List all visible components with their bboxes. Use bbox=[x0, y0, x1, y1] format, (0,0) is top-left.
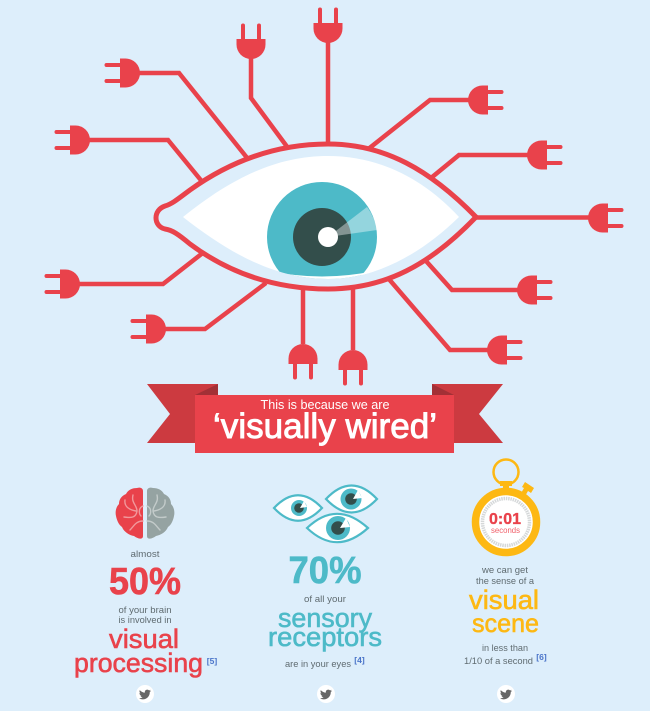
timer reading: 0:01 bbox=[489, 511, 521, 528]
column: eyes bbox=[268, 486, 382, 703]
citation 4: [4] bbox=[354, 655, 365, 665]
almost: almost bbox=[130, 549, 160, 560]
50%: 50% bbox=[109, 561, 181, 603]
plug: upper left bbox=[106, 58, 248, 159]
iris base cut bbox=[288, 272, 368, 279]
are in your eyes: are in your eyes bbox=[285, 659, 351, 670]
icon: twitter bbox=[497, 685, 515, 703]
of your brain: of your brain bbox=[118, 605, 172, 616]
ribbon front bbox=[195, 395, 454, 453]
iris and pupil bbox=[267, 182, 377, 279]
icon: eye bottom bbox=[307, 514, 368, 542]
in less than: in less than bbox=[482, 643, 528, 654]
seconds label: seconds bbox=[491, 526, 520, 535]
1/10 of a second: 1/10 of a second bbox=[464, 656, 533, 667]
citation 5: [5] bbox=[207, 656, 217, 666]
eye outline bbox=[156, 144, 476, 289]
eye white bbox=[183, 156, 459, 279]
plug: top right bbox=[367, 86, 502, 150]
ribbon left tail bbox=[147, 384, 218, 443]
pupil highlight bbox=[318, 227, 338, 247]
plug: middle left bbox=[56, 126, 204, 184]
light reflection bbox=[336, 207, 376, 236]
plug: lower right bbox=[426, 261, 550, 304]
iris bbox=[267, 182, 377, 279]
scene: scene bbox=[472, 608, 539, 638]
of all your: of all your bbox=[304, 594, 346, 605]
plug: lower left bbox=[46, 252, 204, 298]
column: stopwatch bbox=[464, 460, 547, 703]
plug: far right bbox=[476, 204, 622, 232]
wired plugs bbox=[46, 10, 622, 384]
icon: eye small bbox=[274, 495, 322, 521]
plug: bottom centre left bbox=[288, 287, 318, 378]
plug: bottom left bbox=[132, 283, 266, 344]
icon: twitter bbox=[136, 685, 154, 703]
central eye bbox=[156, 144, 476, 300]
plug: upper right bbox=[431, 140, 560, 178]
icon: eye top bbox=[326, 486, 377, 512]
dark pupil bbox=[293, 208, 351, 266]
the sense of a: the sense of a bbox=[476, 576, 535, 587]
ribbon left fold bbox=[195, 384, 218, 395]
visual: visual bbox=[469, 585, 539, 615]
ribbon banner bbox=[147, 384, 503, 453]
ribbon subtitle: This is because we are bbox=[260, 397, 390, 412]
icon: stopwatch bbox=[476, 460, 536, 552]
we can get: we can get bbox=[481, 565, 528, 576]
ribbon title: ‘visually wired’ bbox=[213, 407, 437, 446]
icon: twitter bbox=[317, 685, 335, 703]
column: brain bbox=[74, 488, 217, 703]
processing: processing bbox=[74, 648, 203, 678]
receptors: receptors bbox=[268, 622, 382, 652]
citation 6: [6] bbox=[536, 652, 547, 662]
ribbon right tail bbox=[432, 384, 503, 443]
plug: top left bbox=[236, 26, 288, 148]
plug: bottom centre right bbox=[338, 287, 368, 384]
plug: bottom right bbox=[388, 278, 520, 364]
70%: 70% bbox=[288, 550, 362, 592]
visual: visual bbox=[109, 624, 179, 654]
icon: brain bbox=[116, 488, 174, 539]
sensory: sensory bbox=[278, 603, 372, 633]
plug: top centre bbox=[314, 10, 342, 146]
is involved in: is involved in bbox=[118, 615, 172, 626]
ribbon right fold bbox=[432, 384, 454, 395]
